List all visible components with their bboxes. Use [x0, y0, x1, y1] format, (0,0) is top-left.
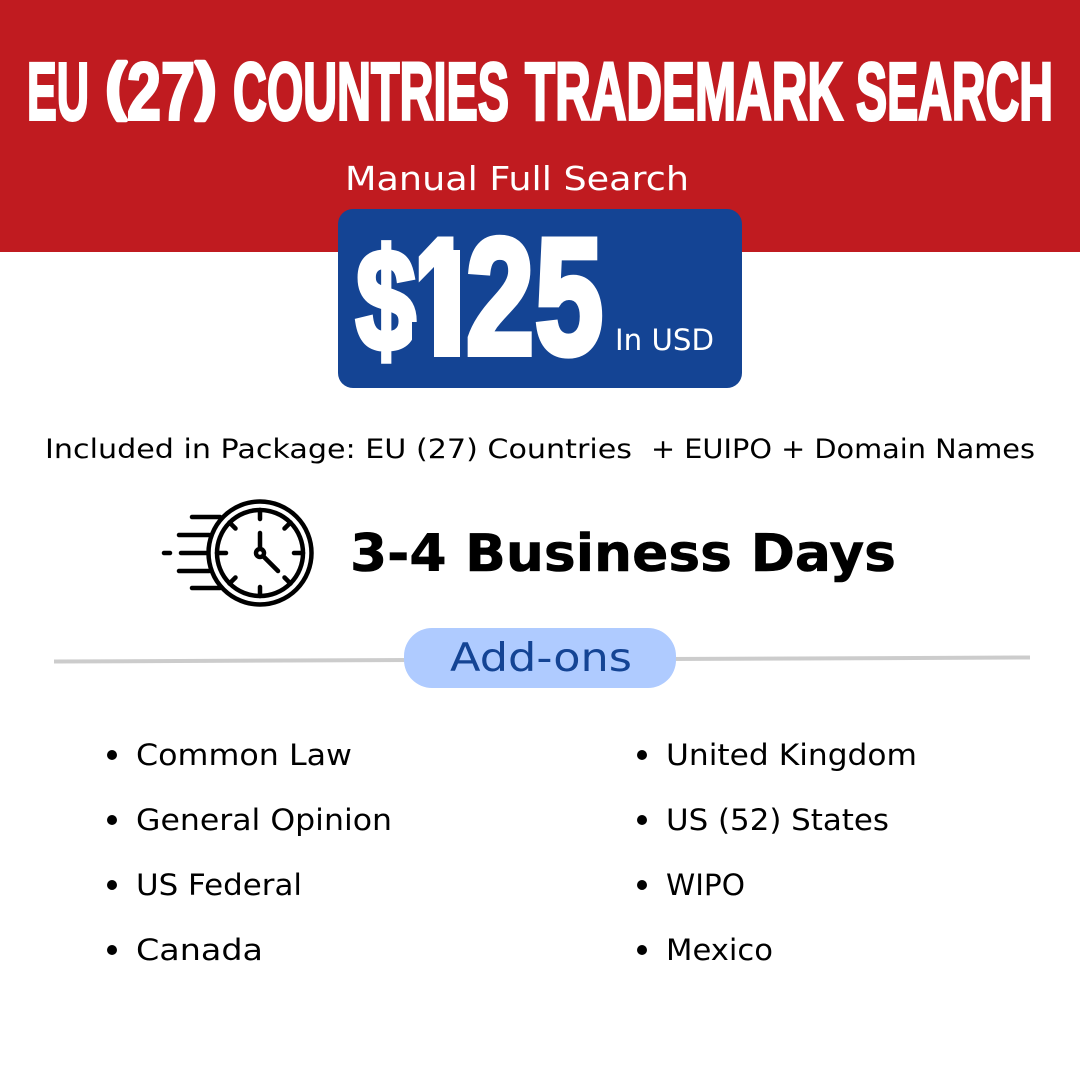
price	[356, 204, 603, 388]
red header band	[0, 0, 1080, 252]
item: US Federal: US Federal	[136, 868, 302, 902]
icon: fast clock	[164, 502, 312, 604]
title: TRADEMARK	[525, 46, 843, 138]
price box background	[338, 209, 742, 388]
title: COUNTRIES	[233, 46, 509, 138]
item: General Opinion: General Opinion	[136, 803, 392, 837]
price: $	[356, 220, 416, 381]
title	[27, 46, 1053, 138]
item: US (52) States: US (52) States	[666, 803, 889, 837]
add-ons right column	[637, 738, 917, 967]
price: 2	[466, 204, 534, 388]
pill background	[404, 628, 676, 688]
title: EU	[27, 46, 89, 138]
currency label: In USD	[615, 323, 714, 357]
pill label: Add-ons	[450, 636, 632, 681]
item: WIPO: WIPO	[666, 868, 745, 902]
package inclusions: + EUIPO + Domain Names	[651, 434, 1035, 465]
add-ons pill	[404, 628, 676, 688]
item: Canada: Canada	[136, 933, 263, 967]
price box	[338, 204, 742, 388]
title: 27	[127, 46, 195, 138]
turnaround time: 3-4 Business Days	[350, 524, 896, 584]
title: )	[196, 52, 216, 121]
package inclusions	[45, 434, 1035, 465]
item: Common Law: Common Law	[136, 738, 352, 772]
title: (	[106, 52, 126, 121]
add-ons left column	[107, 738, 392, 967]
package inclusions: Included in Package: EU (27) Countries	[45, 434, 632, 465]
divider line	[54, 658, 1030, 662]
item: United Kingdom: United Kingdom	[666, 738, 917, 772]
item: Mexico: Mexico	[666, 933, 773, 967]
subtitle: Manual Full Search	[345, 159, 689, 198]
price: 5	[535, 204, 603, 388]
price: 1	[414, 204, 470, 388]
